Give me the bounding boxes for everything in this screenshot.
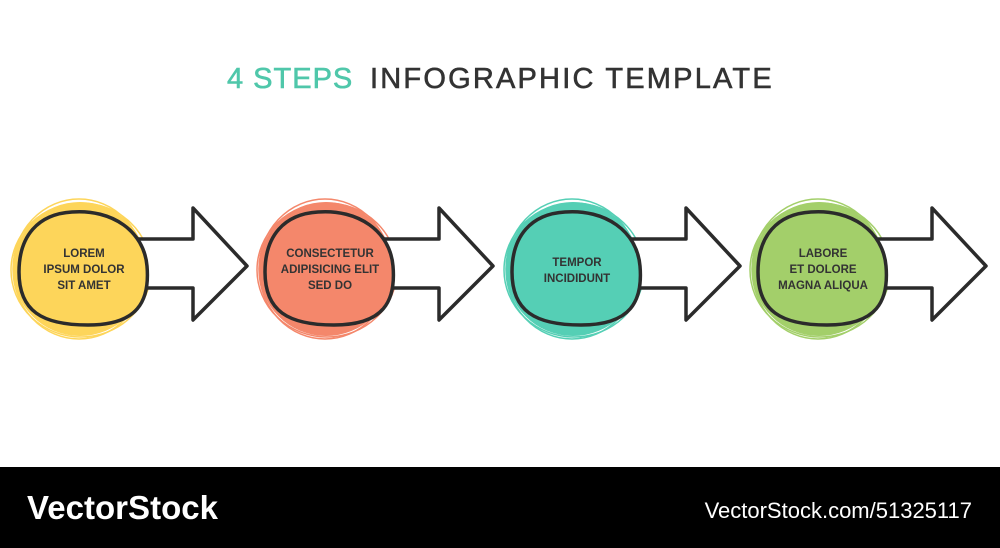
step 4: green bbox=[750, 199, 986, 339]
title: INFOGRAPHIC TEMPLATE bbox=[370, 63, 774, 95]
step 4: green: LABORE bbox=[799, 248, 848, 260]
step 2: red: ADIPISICING ELIT bbox=[281, 264, 379, 276]
step 3: teal bbox=[504, 199, 740, 339]
footer bar: VectorStock.com/51325117 bbox=[705, 498, 972, 523]
title: 4 STEPS bbox=[227, 63, 353, 95]
step 1: yellow: SIT AMET bbox=[57, 280, 111, 292]
step 1: yellow: LOREM bbox=[63, 248, 105, 260]
step 3: teal: INCIDIDUNT bbox=[544, 273, 610, 285]
step 4: green: MAGNA ALIQUA bbox=[778, 280, 868, 292]
footer bar bbox=[0, 467, 1000, 548]
step 1: yellow bbox=[11, 199, 247, 339]
step 2: red: SED DO bbox=[308, 280, 352, 292]
step 2: red bbox=[257, 199, 493, 339]
step 2: red: CONSECTETUR bbox=[286, 248, 374, 260]
step 3: teal: TEMPOR bbox=[552, 257, 602, 269]
footer bar: VectorStock bbox=[27, 489, 219, 526]
step 1: yellow: IPSUM DOLOR bbox=[43, 264, 125, 276]
step 4: green: ET DOLORE bbox=[789, 264, 857, 276]
